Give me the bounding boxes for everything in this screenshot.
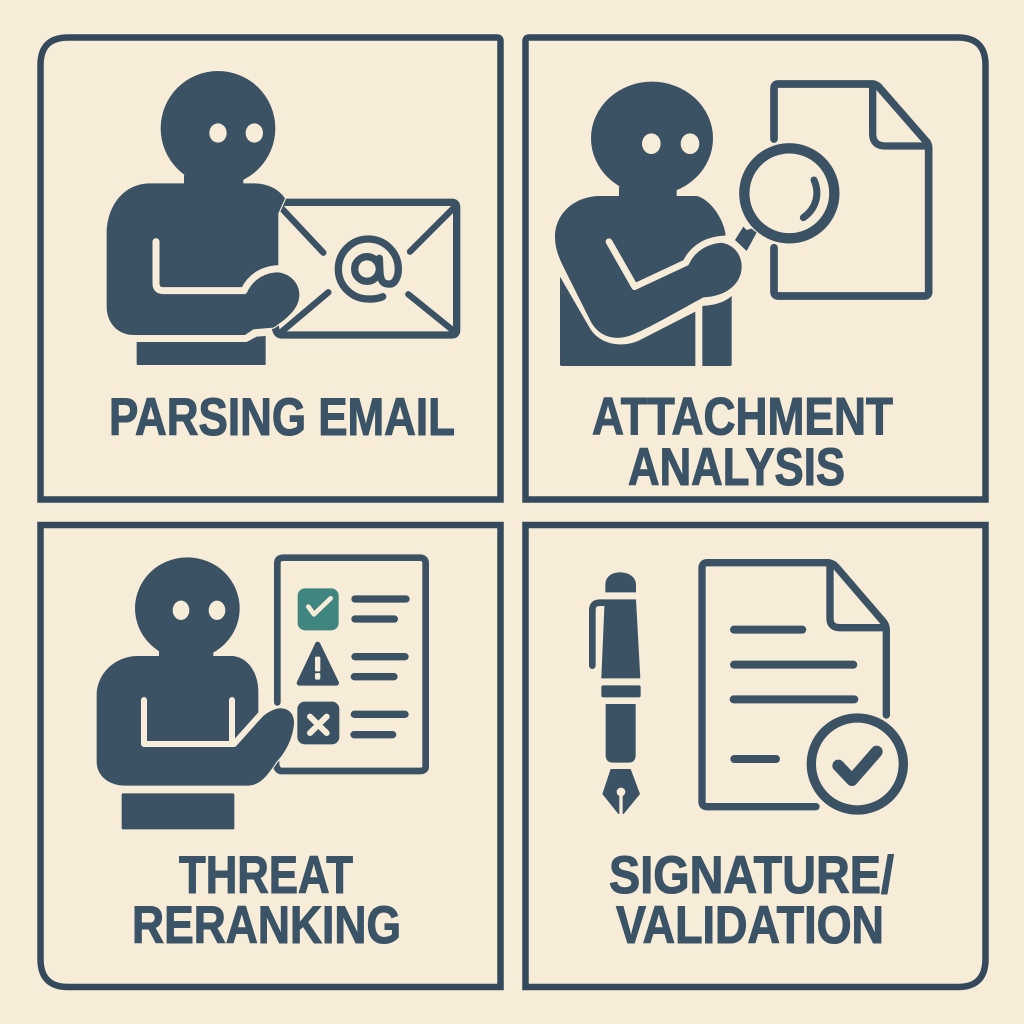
icon: person inspecting document bbox=[555, 82, 929, 366]
icon: person with threat checklist bbox=[97, 557, 426, 829]
check badge bbox=[811, 718, 903, 810]
panel: signature validation bbox=[526, 525, 986, 987]
head bbox=[591, 82, 713, 195]
head bbox=[161, 71, 275, 186]
label: validation: VALIDATION bbox=[616, 896, 884, 955]
torso base bbox=[122, 793, 234, 829]
magnifying glass bbox=[735, 148, 834, 251]
at sign bbox=[338, 239, 398, 299]
label: attachment: ATTACHMENT bbox=[592, 388, 893, 446]
fountain pen bbox=[592, 572, 641, 815]
rejected x box bbox=[297, 702, 339, 744]
checklist document bbox=[276, 558, 426, 771]
document bbox=[702, 563, 886, 807]
arm outline bbox=[156, 242, 281, 291]
panel frame bbox=[40, 38, 500, 500]
body and arm bbox=[97, 648, 294, 786]
label: reranking: RERANKING bbox=[132, 896, 401, 955]
panel frame bbox=[526, 38, 986, 500]
green check box bbox=[298, 588, 339, 630]
icon: pen and signed document bbox=[592, 563, 903, 815]
checklist lines bbox=[354, 599, 406, 735]
body and arm bbox=[107, 175, 299, 335]
envelope bbox=[275, 202, 457, 335]
label: signature: SIGNATURE/ bbox=[609, 846, 894, 905]
torso base bbox=[137, 336, 266, 365]
eyes bbox=[209, 123, 263, 143]
eyes bbox=[173, 601, 225, 620]
panel frame bbox=[526, 525, 986, 987]
panel: attachment analysis bbox=[526, 38, 986, 500]
eyes bbox=[642, 133, 699, 154]
head bbox=[135, 557, 240, 659]
arm outline bbox=[144, 700, 260, 744]
label: analysis: ANALYSIS bbox=[628, 438, 845, 497]
label: parsing email: PARSING EMAIL bbox=[109, 388, 455, 447]
document bbox=[774, 84, 929, 296]
panel: parsing email bbox=[40, 38, 500, 500]
upper body and arm bbox=[555, 187, 742, 338]
arm outline bbox=[609, 239, 727, 287]
torso right bbox=[702, 296, 732, 366]
label: threat: THREAT bbox=[179, 846, 353, 905]
panel: threat reranking bbox=[40, 525, 500, 987]
panel frame bbox=[40, 525, 500, 987]
torso bbox=[560, 277, 695, 366]
icon: person holding envelope bbox=[107, 71, 457, 365]
warning triangle bbox=[299, 644, 336, 683]
